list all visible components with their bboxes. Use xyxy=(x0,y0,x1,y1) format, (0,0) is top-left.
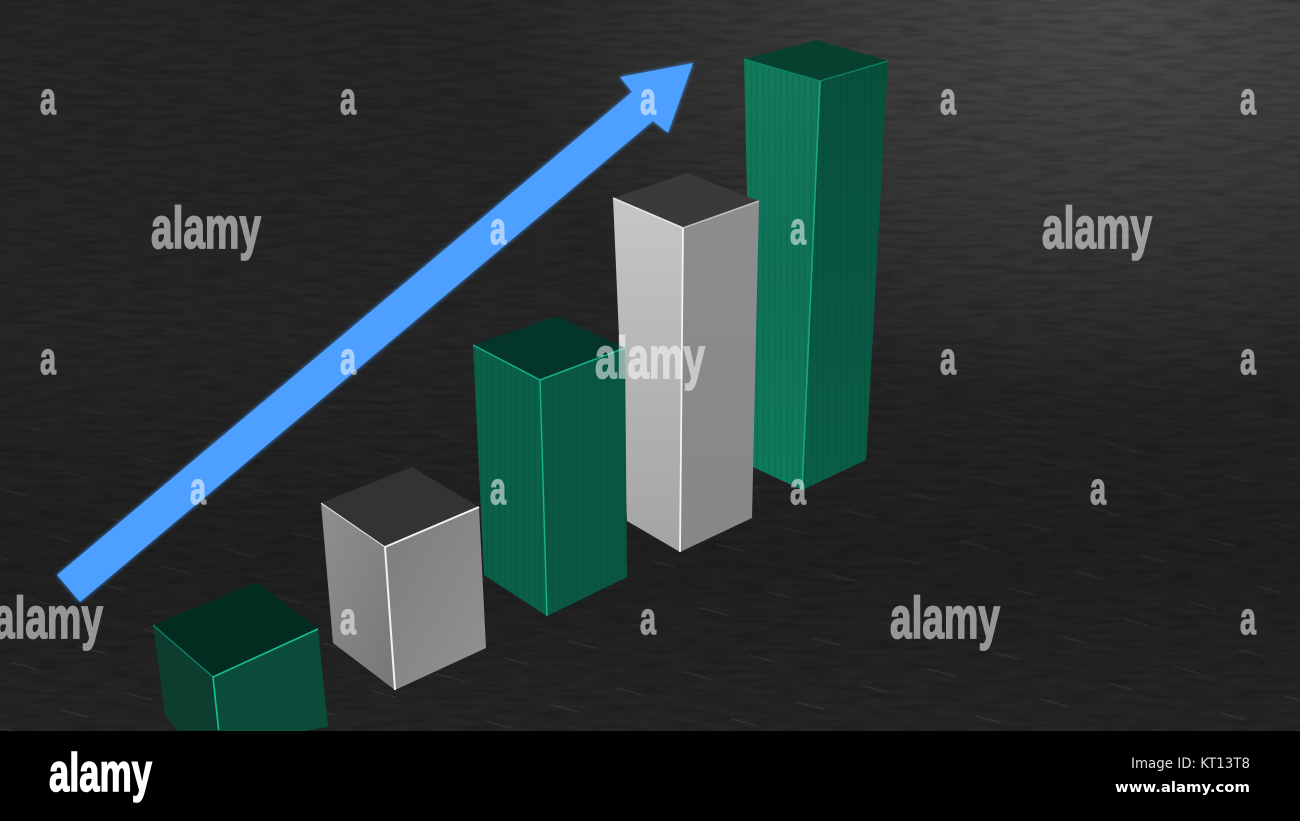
small watermark marks: a xyxy=(790,463,807,514)
watermark logos xyxy=(0,196,1152,651)
small watermark marks: a xyxy=(790,203,807,254)
bar 1: small green cube xyxy=(153,582,328,731)
growth arrow xyxy=(57,63,693,602)
small watermark marks: a xyxy=(340,333,357,384)
small watermark marks: a xyxy=(490,203,507,254)
small watermark marks: a xyxy=(640,593,657,644)
small watermark marks: a xyxy=(40,73,57,124)
small watermark marks: a xyxy=(940,73,957,124)
small watermark marks: a xyxy=(940,333,957,384)
image ID: Image ID: KT13T8 xyxy=(1131,756,1250,772)
watermark logos: alamy xyxy=(595,326,705,391)
small watermark marks: a xyxy=(340,73,357,124)
bar 3: short silver xyxy=(321,467,486,690)
small watermark marks: a xyxy=(490,463,507,514)
footer logo: alamy xyxy=(49,743,152,803)
small watermark marks: a xyxy=(40,333,57,384)
small watermark marks: a xyxy=(340,593,357,644)
bar 4: medium green xyxy=(473,316,627,616)
small watermark marks: a xyxy=(190,463,207,514)
website URL: www.alamy.com xyxy=(1115,780,1250,796)
small watermark marks: a xyxy=(1090,463,1107,514)
small watermark marks xyxy=(40,73,1257,644)
small watermark marks: a xyxy=(640,73,657,124)
bar 5: tall silver xyxy=(613,173,759,552)
watermark logos: alamy xyxy=(151,196,261,261)
footer bar xyxy=(0,731,1300,821)
small watermark marks: a xyxy=(1240,73,1257,124)
watermark logos: alamy xyxy=(1042,196,1152,261)
small watermark marks: a xyxy=(1240,593,1257,644)
watermark logos: alamy xyxy=(890,586,1000,651)
bar 6: tall green xyxy=(744,40,888,490)
small watermark marks: a xyxy=(1240,333,1257,384)
